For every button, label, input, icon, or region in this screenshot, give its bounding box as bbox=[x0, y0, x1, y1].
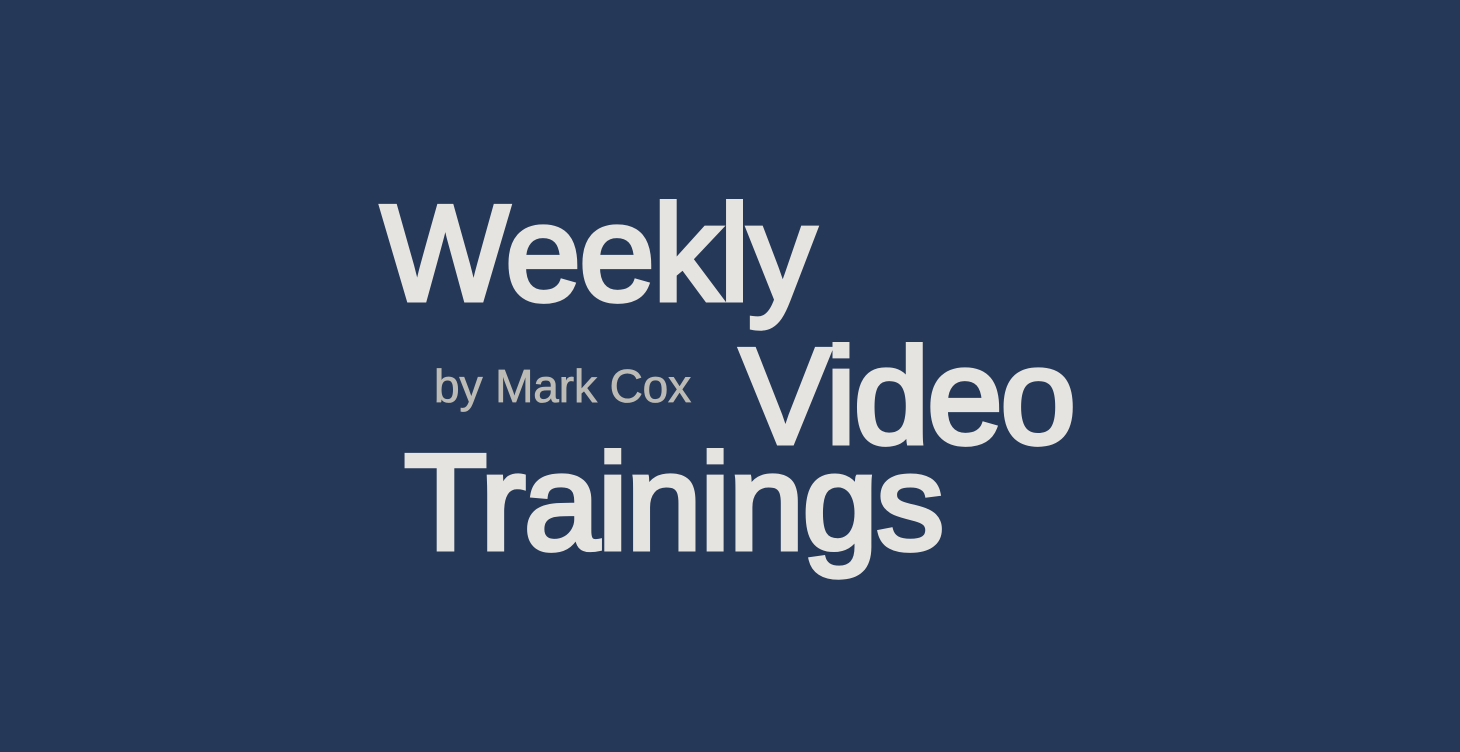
byline: by Mark Cox bbox=[434, 360, 691, 412]
title word: Trainings: Trainings bbox=[404, 426, 943, 578]
title word: Weekly: Weekly bbox=[381, 177, 814, 329]
title word: Video: Video bbox=[740, 320, 1074, 472]
